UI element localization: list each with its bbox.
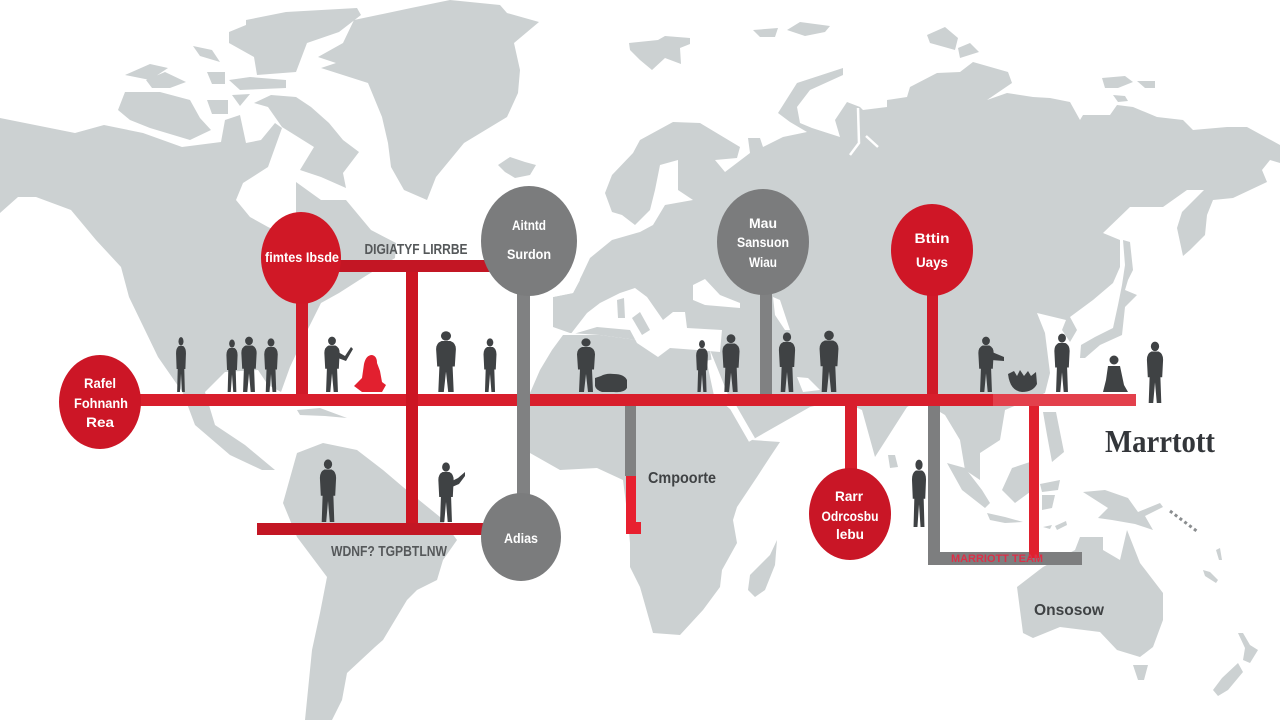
connector: red stem — [927, 295, 938, 394]
map: Australia — [1017, 530, 1163, 657]
person — [176, 337, 186, 392]
person — [226, 340, 238, 392]
node: red upper — [261, 212, 341, 304]
map: northern islands — [629, 22, 1155, 102]
node: red left: Rafel — [84, 375, 116, 391]
node: red right — [891, 204, 973, 296]
label: composite: Cmpoorte — [648, 470, 716, 487]
map: Africa — [530, 335, 780, 635]
person with extended arm — [978, 337, 1004, 392]
node: gray top: Surdon — [507, 246, 551, 262]
map: North and Central America — [0, 115, 396, 470]
person with raised arm — [324, 337, 353, 392]
barrel object — [595, 374, 627, 392]
connector: main red timeline — [138, 394, 1136, 406]
label: lower branch: WDNF? TGPBTLNW — [331, 543, 448, 560]
red seated figure — [354, 355, 386, 392]
map: Japan — [1080, 240, 1137, 358]
person — [1147, 342, 1163, 403]
node: gray top — [481, 186, 577, 296]
person — [484, 338, 496, 392]
person — [264, 338, 278, 392]
connector: gray drop — [625, 406, 636, 476]
map: Cuba — [297, 408, 347, 418]
seas cut into land — [553, 273, 840, 400]
person — [241, 337, 257, 392]
connector: red foot — [626, 476, 641, 534]
seated person — [1103, 356, 1128, 392]
node: red left — [59, 355, 141, 449]
connector: gray L-shaped bracket — [928, 406, 1082, 565]
node: red upper: fimtes Ibsde — [265, 249, 339, 265]
node: red right: Bttin — [914, 230, 950, 246]
logo: Marriott: Marrtott — [1105, 423, 1215, 459]
person — [820, 331, 838, 392]
map: Greenland — [318, 0, 539, 200]
map: Tasmania and New Zealand — [1133, 633, 1258, 696]
connector: faded end of timeline — [993, 394, 1136, 406]
person below — [912, 460, 926, 527]
node: red lower: Rarr — [835, 488, 864, 504]
node: gray centre: Mau — [749, 215, 777, 231]
person — [1054, 334, 1070, 392]
person — [577, 338, 595, 392]
connector: upper red branch — [338, 260, 492, 272]
person — [779, 332, 795, 392]
Solomon island dashes — [1170, 511, 1198, 532]
node: red left: Rea — [86, 414, 114, 430]
connector: red vertical branch — [406, 272, 418, 524]
node: gray bottom — [481, 493, 561, 581]
node: gray top: Aitntd — [512, 217, 546, 233]
label: Oceania: Onsosow — [1034, 602, 1105, 619]
connector: gray stem — [517, 292, 530, 496]
map: Indonesia and Philippines — [947, 412, 1067, 530]
node: gray bottom: Adias — [504, 530, 538, 546]
person — [436, 331, 456, 392]
map: Arctic islands — [118, 8, 361, 140]
connector: gray stem — [760, 294, 772, 394]
label: upper branch: DIGIATYF LIRRBE — [364, 241, 468, 258]
node: gray centre: Sansuon — [737, 234, 789, 250]
people silhouettes on timeline — [176, 331, 1163, 527]
node: gray centre — [717, 189, 809, 295]
node: gray centre: Wiau — [749, 254, 777, 270]
map: Pacific islands — [1203, 548, 1222, 583]
node: red right: Uays — [916, 254, 948, 270]
label on bracket: MARRIOTT TEAM — [951, 553, 1043, 565]
map: South America — [283, 443, 457, 720]
map: Sri Lanka and Madagascar — [748, 455, 898, 597]
map: Baffin Island — [254, 95, 359, 188]
person below — [320, 459, 336, 522]
node: red lower: Odrcosbu — [822, 508, 878, 524]
person — [722, 334, 740, 392]
node: red lower — [809, 468, 891, 560]
person below with arm — [438, 462, 465, 522]
basket object — [1008, 370, 1037, 392]
connector: red stem to lower node — [845, 406, 857, 470]
connector: red stem to upper node — [296, 300, 308, 394]
connector: lower red branch — [257, 523, 489, 535]
connector: red vertical — [1029, 406, 1039, 558]
node: red left: Fohnanh — [74, 395, 128, 411]
map: Eurasia — [553, 62, 1280, 480]
map: Iceland — [498, 157, 536, 178]
person — [696, 340, 708, 392]
node: red lower: lebu — [836, 526, 864, 542]
map: New Guinea — [1083, 490, 1163, 530]
